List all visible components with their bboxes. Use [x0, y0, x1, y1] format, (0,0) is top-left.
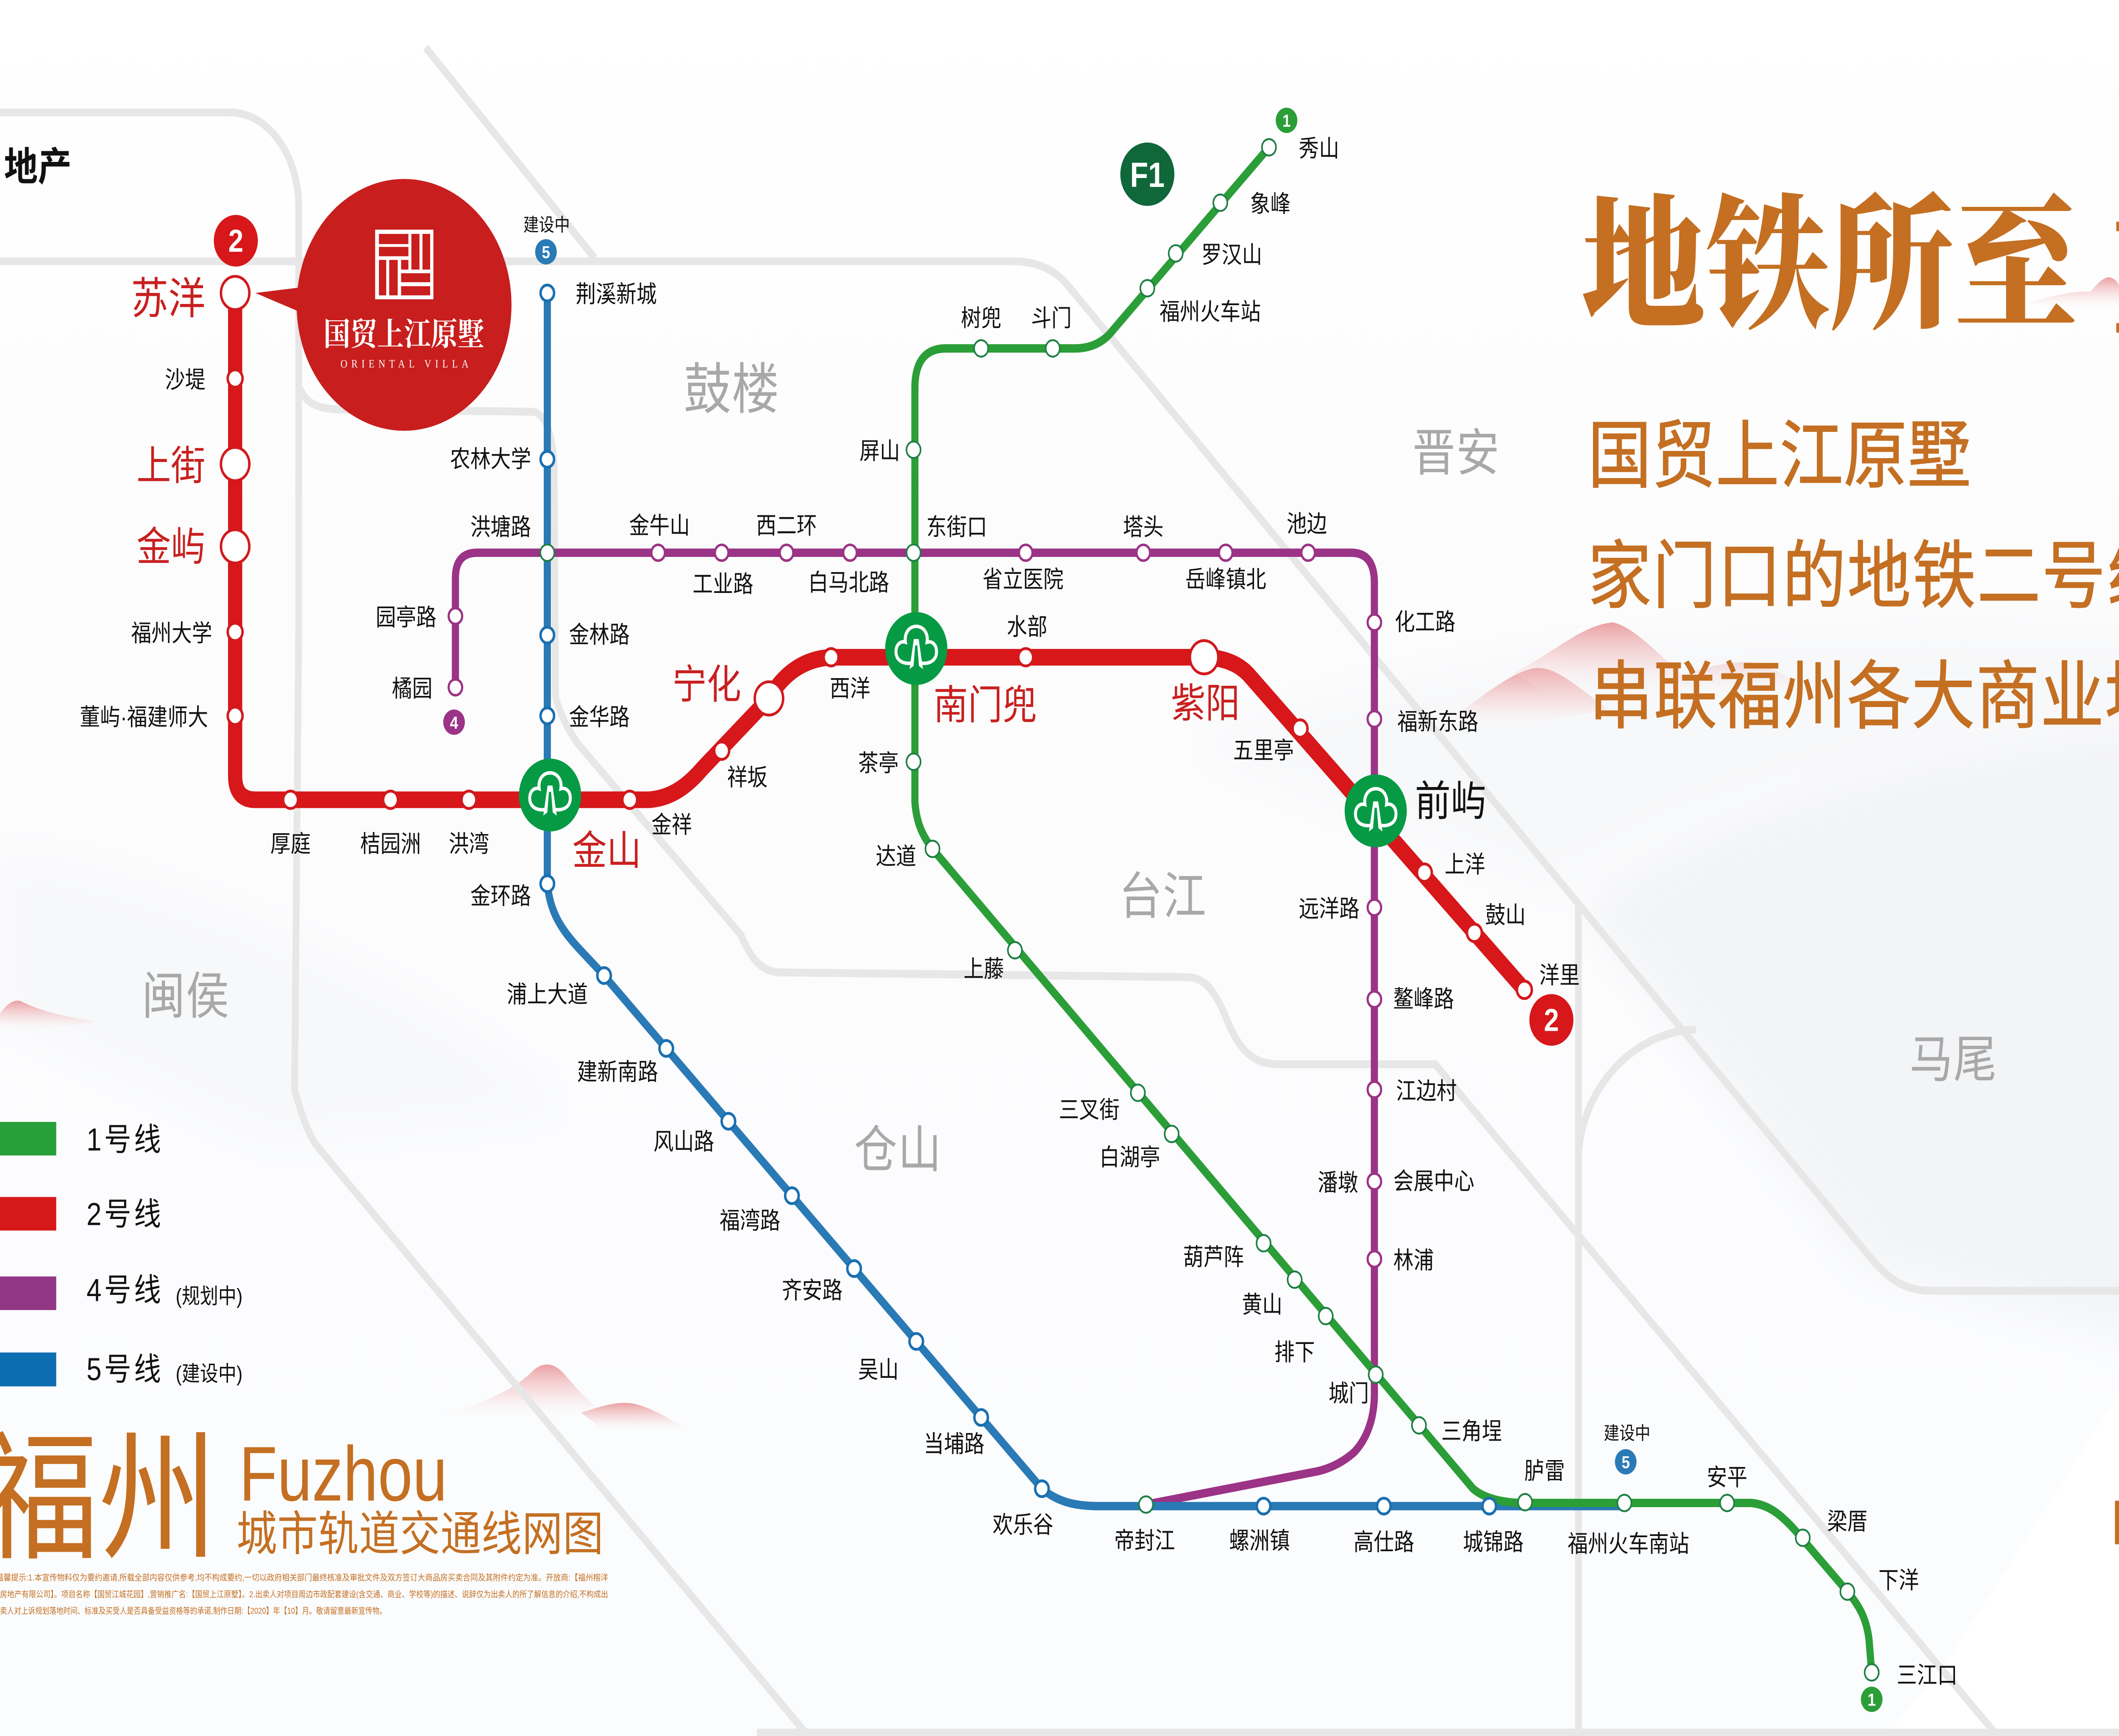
developer name fragment: 地产 [4, 145, 72, 189]
labels line 5: 当埔路 [924, 1431, 984, 1458]
labels line 4: 福新东路 [1397, 709, 1478, 736]
labels line 2: 福州大学 [131, 620, 212, 647]
labels line 1: 上藤 [964, 956, 1004, 982]
labels line 1: 达道 [876, 844, 916, 870]
line badges: 2 [1544, 1002, 1559, 1038]
labels line 5: 城锦路 [1463, 1530, 1524, 1556]
labels line 1: 排下 [1274, 1339, 1315, 1366]
map title: Fuzhou [239, 1431, 447, 1517]
line badges: 5 [542, 243, 550, 262]
labels line 2: 厚庭 [270, 831, 311, 857]
labels line 4: 园亭路 [376, 605, 437, 631]
map title [0, 1421, 604, 1577]
labels line 4: 工业路 [692, 571, 754, 598]
interchange: Jinshan [519, 759, 581, 832]
disclaimer: 温馨提示:1.本宣传物料仅为要约邀请,所载全部内容仅供参考,均不构成要约,一切以政府相关部门最终核准及审批文件及双方签订大商品房买卖合同及其附件约定为准。开放商:【福州榕洋 [0, 1573, 608, 1583]
line badges: 2 [228, 223, 243, 259]
district labels: 晋安 [1412, 424, 1500, 481]
labels line 4: 橘园 [392, 676, 432, 702]
labels line 4: 化工路 [1395, 609, 1455, 636]
labels line 4: 远洋路 [1299, 896, 1360, 922]
major station names in red: 紫阳 [1171, 681, 1240, 726]
labels line 2: 水部 [1007, 614, 1047, 640]
labels line 4: 林浦 [1393, 1248, 1434, 1274]
subheading [1588, 414, 2119, 738]
major station names in red: 金屿 [136, 524, 206, 569]
labels line 1 [858, 136, 1958, 1689]
labels line 5: 建新南路 [577, 1059, 658, 1085]
labels line 1: 胪雷 [1524, 1458, 1565, 1485]
labels line 1: 罗汉山 [1201, 242, 1262, 268]
labels line 4: 江边村 [1396, 1078, 1457, 1104]
subheading: 国贸上江原墅 [1588, 414, 1972, 498]
labels line 5: 农林大学 [450, 446, 531, 473]
headline: 地铁所至 [1581, 187, 2080, 349]
labels line 2: 桔园洲 [360, 831, 421, 857]
labels line 4: 省立医院 [982, 567, 1064, 593]
labels line 1: 梁厝 [1827, 1509, 1868, 1536]
line badges: 1 [1282, 111, 1290, 131]
labels line 2: 洋里 [1539, 963, 1580, 989]
district labels [142, 359, 1997, 1178]
icon: project logo [375, 230, 434, 299]
right edge mark [2115, 1501, 2119, 1544]
labels line 2: 西洋 [830, 676, 870, 702]
line 2 red [235, 293, 1524, 990]
labels line 2: 董屿·福建师大 [80, 704, 208, 731]
major station names in red: 上街 [136, 443, 206, 489]
labels line 4: 鳌峰路 [1393, 986, 1454, 1013]
callout: project bubble [256, 179, 512, 431]
labels line 5: 浦上大道 [507, 982, 588, 1008]
labels line 5: 福湾路 [720, 1208, 781, 1235]
line 1 green [915, 147, 1872, 1672]
labels line 4: 金牛山 [629, 513, 690, 539]
major station names in red [131, 275, 1240, 874]
station name: Qianyu: 前屿 [1415, 778, 1487, 825]
interchange: Qianyu [1345, 774, 1407, 847]
labels line 1: 三江口 [1897, 1663, 1958, 1689]
district labels: 台江 [1119, 868, 1207, 925]
disclaimer [0, 1573, 608, 1616]
labels line 5: 欢乐谷 [993, 1512, 1054, 1538]
labels line 1: 三角埕 [1441, 1419, 1502, 1445]
labels line 5: 螺洲镇 [1229, 1528, 1290, 1554]
labels line 1: 福州火车站 [1160, 299, 1261, 326]
ink mountains [0, 277, 2119, 1433]
interchange: Nanmendou [885, 612, 947, 685]
labels line 1: 象峰 [1250, 191, 1290, 218]
labels line 4: 会展中心 [1393, 1168, 1474, 1195]
labels line 1: 黄山 [1242, 1292, 1282, 1319]
line badges: 建设中 [1604, 1424, 1650, 1444]
labels line 5: 金华路 [569, 704, 630, 731]
labels line 2: 沙堤 [165, 367, 206, 393]
line badges: F1 [1130, 156, 1165, 195]
stations line 4 [449, 545, 1381, 1267]
legend: 1号线 [86, 1122, 164, 1157]
district labels: 马尾 [1910, 1031, 1997, 1088]
labels line 5: 风山路 [653, 1129, 714, 1155]
labels line 5: 洪塘路 [470, 515, 531, 541]
labels line 1: 秀山 [1299, 136, 1339, 162]
map title: 城市轨道交通线网图 [236, 1508, 604, 1561]
labels line 4: 白马北路 [808, 570, 889, 596]
labels line 2: 祥坂 [727, 765, 768, 791]
disclaimer: 房地产有限公司】。项目名称【国贸江城花园】,营销推广名:【国贸上江原墅】。2.出卖人对项目周边市政配套建设(含交通、商业、学校等)的描述、说辞仅为出卖人的所了解信息的介绍,不构成出 [0, 1589, 608, 1599]
stations line 5 [541, 285, 1496, 1514]
stations line 1 [540, 139, 1879, 1680]
labels line 4: 东街口 [926, 515, 987, 541]
callout: project bubble: 国贸上江原墅 [323, 317, 484, 353]
labels line 1: 茶亭 [858, 750, 899, 777]
legend: (规划中) [176, 1284, 242, 1308]
labels line 1: 白湖亭 [1099, 1145, 1160, 1171]
district labels: 鼓楼 [684, 359, 780, 420]
labels line 1: 安平 [1707, 1465, 1747, 1491]
labels line 5: 齐安路 [782, 1278, 843, 1304]
legend [0, 1122, 242, 1387]
labels line 4: 岳峰镇北 [1185, 567, 1266, 593]
line badges: 1 [1868, 1690, 1876, 1710]
district labels: 闽侯 [142, 968, 230, 1024]
labels line 4: 潘墩 [1318, 1170, 1358, 1196]
disclaimer: 卖人对上诉规划落地时间、标准及买受人是否具备受益资格等的承诺,制作日期:【2020】年【10】月。敬请留意最新宣传物。 [0, 1606, 387, 1616]
labels line 2: 上洋 [1445, 851, 1485, 878]
line badges: 4 [450, 713, 459, 733]
legend: 4号线 [86, 1272, 164, 1308]
legend: (建设中) [176, 1362, 242, 1385]
district labels: 仓山 [854, 1121, 942, 1178]
labels line 1: 葫芦阵 [1183, 1244, 1244, 1271]
callout: project bubble: ORIENTAL VILLA [341, 358, 469, 370]
labels line 4: 西二环 [756, 513, 817, 539]
labels line 2: 鼓山 [1485, 902, 1526, 929]
labels line 1: 树兜 [961, 305, 1001, 332]
legend: 5号线 [86, 1352, 164, 1387]
labels line 2: 五里亭 [1233, 737, 1294, 764]
labels line 2: 洪湾 [449, 831, 489, 857]
labels line 1: 下洋 [1878, 1567, 1919, 1594]
line badges: 5 [1621, 1452, 1630, 1472]
labels line 4: 池边 [1287, 511, 1327, 537]
labels line 1: 斗门 [1031, 305, 1072, 332]
labels line 5: 吴山 [858, 1357, 899, 1383]
line 4 purple [456, 553, 1374, 1505]
legend: 2号线 [86, 1196, 164, 1232]
major station names in red: 南门兜 [934, 682, 1037, 728]
labels line 5: 荆溪新城 [576, 281, 657, 308]
labels line 4 [376, 511, 1478, 1274]
labels line 5: 高仕路 [1354, 1530, 1414, 1556]
labels line 5 [450, 281, 1524, 1556]
labels line 1: 屏山 [859, 438, 900, 465]
labels line 5: 金林路 [569, 622, 630, 648]
labels line 1: 三叉街 [1059, 1097, 1120, 1124]
labels line 2: 金祥 [651, 812, 692, 838]
line badges [214, 108, 1883, 1712]
labels line 1: 城门 [1329, 1381, 1369, 1407]
headline edge marks [2116, 222, 2119, 333]
line 5 blue [547, 293, 1622, 1506]
major station names in red: 苏洋 [131, 275, 206, 323]
labels line 2 [80, 367, 1580, 989]
stations line 2 [221, 276, 1532, 999]
labels line 4: 塔头 [1123, 515, 1164, 541]
major station names in red: 宁化 [672, 662, 741, 707]
labels line 1: 福州火车南站 [1568, 1531, 1689, 1558]
labels line 5: 帝封江 [1114, 1528, 1175, 1554]
line badges: 建设中 [523, 215, 570, 235]
major station names in red: 金山 [572, 828, 641, 874]
labels line 5: 金环路 [470, 883, 531, 910]
